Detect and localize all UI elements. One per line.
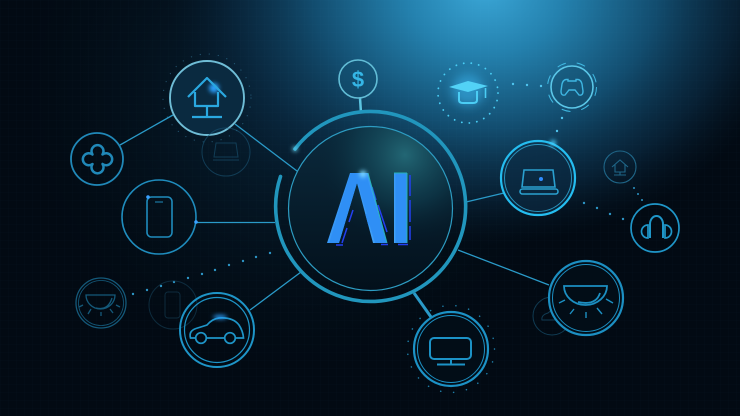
node: graduation cap	[438, 63, 498, 123]
AI title: AI	[327, 151, 414, 266]
AI dashed shadow	[336, 175, 410, 245]
node: phone	[122, 180, 198, 254]
node: home	[163, 54, 251, 142]
ring spark	[293, 147, 297, 151]
hub inner disc	[288, 126, 452, 290]
hub outer broken ring	[276, 111, 466, 301]
node: dollar: $	[352, 67, 364, 92]
ghost node: small home	[604, 151, 636, 183]
node: clover	[71, 133, 123, 185]
node: car	[180, 293, 254, 367]
ghost node: phone	[149, 281, 197, 329]
node: dollar	[339, 60, 377, 98]
ghost node: laptop	[202, 128, 250, 176]
dotted connectors	[132, 83, 643, 295]
node: laptop	[501, 140, 575, 215]
AI bevel edges	[368, 173, 407, 243]
node: right lamp	[549, 261, 623, 335]
connector lines	[120, 98, 549, 317]
ghost node: small car	[533, 297, 571, 335]
apex glow	[360, 170, 366, 178]
node: left lamp	[76, 278, 126, 328]
node: monitor	[408, 306, 494, 392]
node: headphones	[631, 204, 679, 252]
central AI hub	[276, 111, 466, 301]
node: gamepad	[548, 62, 596, 112]
AI letter base shapes	[327, 173, 407, 243]
